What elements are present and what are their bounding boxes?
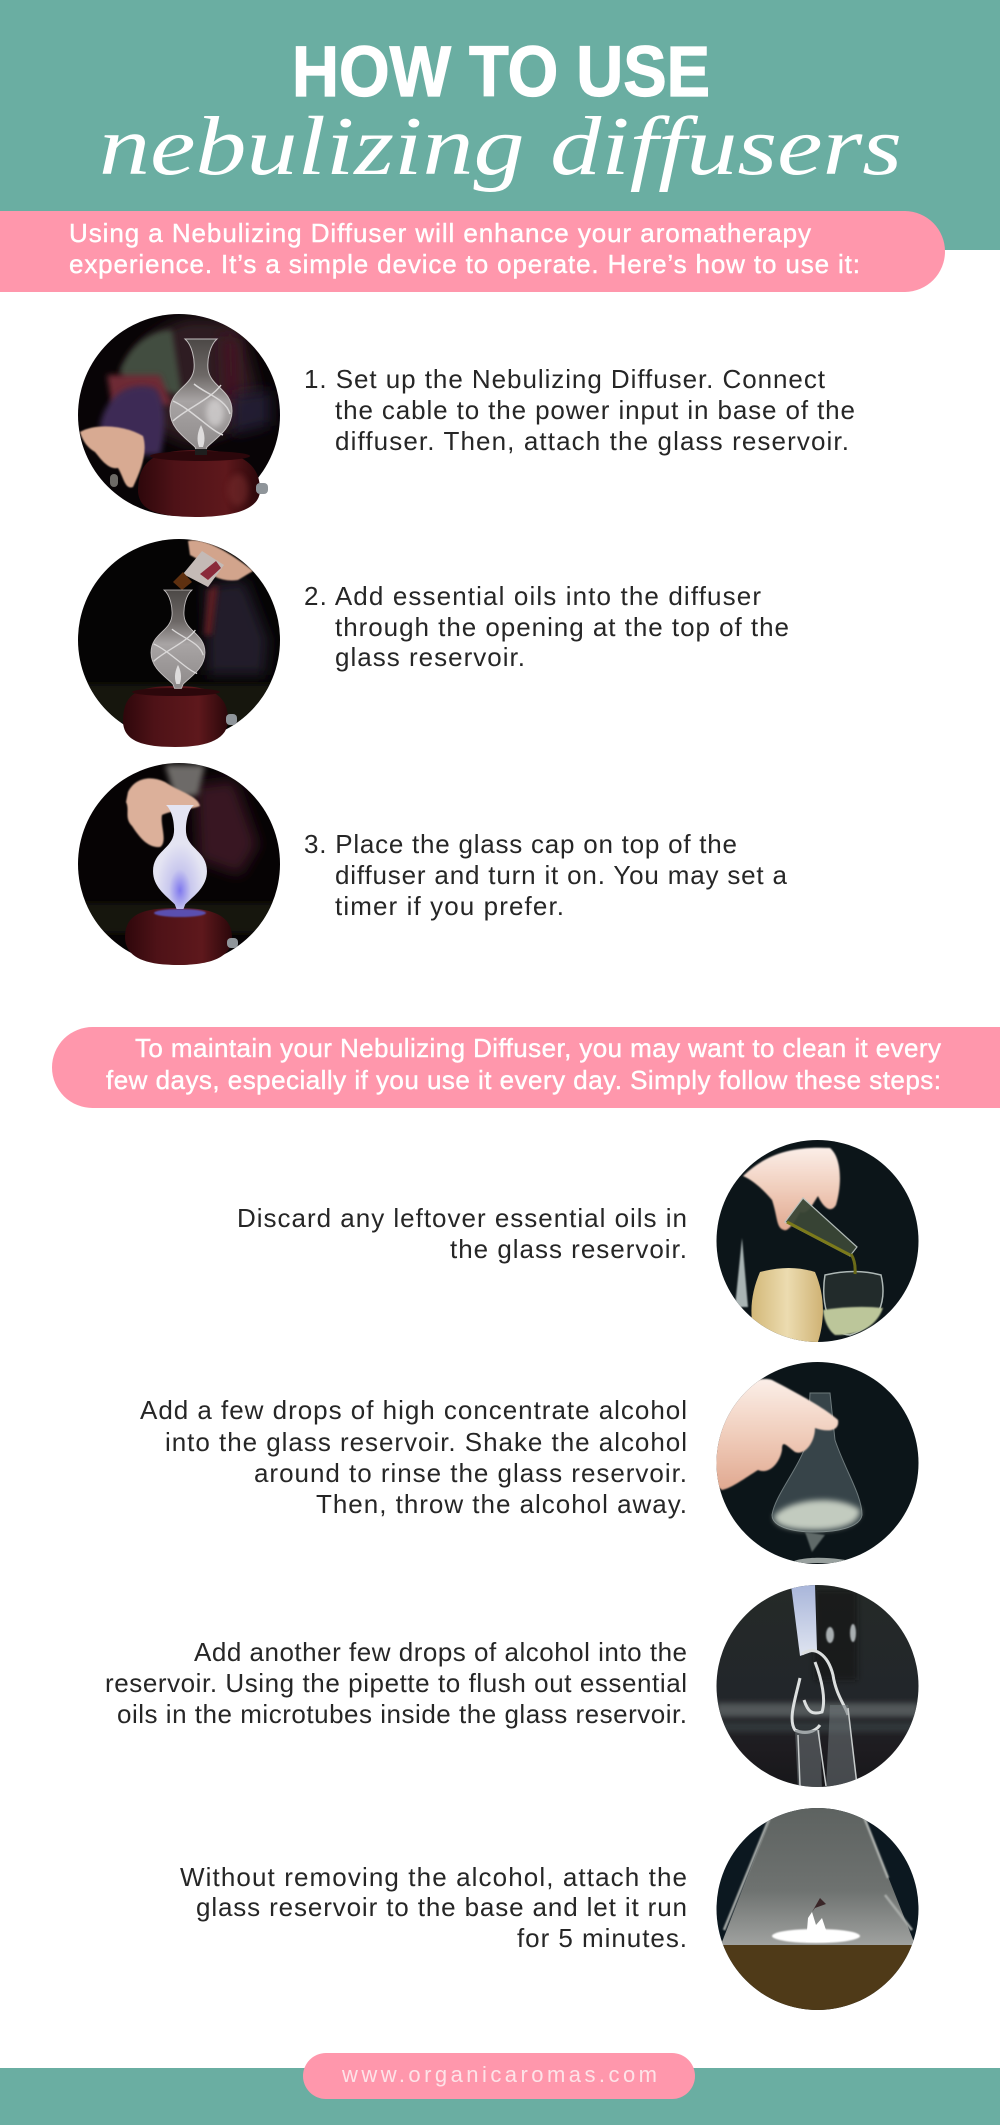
flask body	[722, 1806, 914, 1946]
wooden base	[138, 450, 260, 517]
final run text: for 5 minutes.	[517, 1923, 687, 1953]
photo: step 2 add oil	[78, 539, 280, 747]
step 2 text: glass reservoir.	[335, 642, 525, 672]
photo: shaking flask	[709, 1362, 919, 1565]
step 2 text: 2. Add essential oils into the diffuser	[304, 581, 761, 611]
discard text: the glass reservoir.	[450, 1234, 687, 1264]
discard text	[237, 1203, 687, 1264]
brown base	[723, 1945, 912, 2010]
add alcohol text: around to rinse the glass reservoir.	[254, 1458, 687, 1488]
hand	[743, 1148, 840, 1230]
step 2 text	[304, 581, 789, 672]
photo: diffuser running	[716, 1806, 919, 2013]
connector	[226, 714, 237, 725]
discard text: Discard any leftover essential oils in	[237, 1203, 687, 1233]
maintenance text	[106, 1033, 941, 1095]
maintenance banner	[52, 1027, 1000, 1108]
step 3 text: diffuser and turn it on. You may set a	[335, 860, 788, 890]
add alcohol text	[140, 1395, 687, 1519]
pipette text: Add another few drops of alcohol into the	[194, 1637, 687, 1667]
add alcohol text: Then, throw the alcohol away.	[316, 1489, 687, 1519]
pipette text: oils in the microtubes inside the glass reservoir.	[117, 1699, 687, 1729]
step 3 text: 3. Place the glass cap on top of the	[304, 829, 737, 859]
step 3 text	[304, 829, 788, 921]
pipette text	[105, 1637, 687, 1729]
final run text: glass reservoir to the base and let it run	[196, 1892, 687, 1922]
hand on cap	[126, 778, 200, 847]
title line: how to use: HOW TO USE	[292, 33, 710, 112]
glass vase	[170, 339, 232, 455]
intro text: experience. It’s a simple device to operate. Here’s how to use it:	[69, 249, 860, 279]
title line: nebulizing diffusers: nebulizing diffusers	[99, 100, 902, 193]
hand	[80, 426, 145, 487]
hand	[709, 1379, 838, 1490]
flask	[772, 1393, 862, 1532]
title	[99, 33, 902, 193]
maintenance text: To maintain your Nebulizing Diffuser, you may want to clean it every	[135, 1033, 941, 1063]
photo: step 1 connect cable	[78, 314, 280, 517]
wooden cup	[751, 1268, 823, 1342]
step 2 text: through the opening at the top of the	[335, 612, 789, 642]
connector	[256, 483, 268, 494]
hand and oil bottle	[188, 540, 253, 580]
intro banner	[0, 211, 945, 292]
url text: www.organicaromas.com	[341, 2062, 657, 2087]
footer url pill	[303, 2053, 695, 2099]
step 1 text: diffuser. Then, attach the glass reservoir.	[335, 426, 849, 456]
footer band	[0, 2068, 1000, 2125]
add alcohol text: Add a few drops of high concentrate alcohol	[140, 1395, 687, 1425]
step 1 text	[304, 364, 855, 456]
glass stem	[795, 1705, 857, 1790]
glass loop	[792, 1651, 848, 1732]
wooden base	[123, 686, 228, 747]
pipette tube	[791, 1585, 817, 1656]
glowing vase	[153, 805, 207, 909]
photo: pipette and microtube	[716, 1585, 919, 1790]
step 1 text: the cable to the power input in base of the	[335, 395, 855, 425]
final run text: Without removing the alcohol, attach the	[180, 1862, 687, 1892]
tilted glass reservoir	[785, 1198, 857, 1256]
header band	[0, 0, 1000, 250]
intro text	[69, 218, 860, 279]
photo: pouring out oil	[716, 1140, 919, 1343]
light pool	[772, 1929, 860, 1943]
photo: step 3 place cap	[78, 763, 280, 965]
step 3 text: timer if you prefer.	[335, 891, 564, 921]
glass vase	[151, 590, 205, 688]
add alcohol text: into the glass reservoir. Shake the alcohol	[165, 1427, 687, 1457]
wine glass	[824, 1272, 883, 1335]
wooden base	[125, 908, 232, 965]
pipette text: reservoir. Using the pipette to flush out essential	[105, 1668, 687, 1698]
maintenance text: few days, especially if you use it every day. Simply follow these steps:	[106, 1065, 941, 1095]
final run text	[180, 1862, 687, 1953]
connector	[227, 938, 238, 948]
step 1 text: 1. Set up the Nebulizing Diffuser. Connect	[304, 364, 826, 394]
intro text: Using a Nebulizing Diffuser will enhance your aromatherapy	[69, 218, 811, 248]
